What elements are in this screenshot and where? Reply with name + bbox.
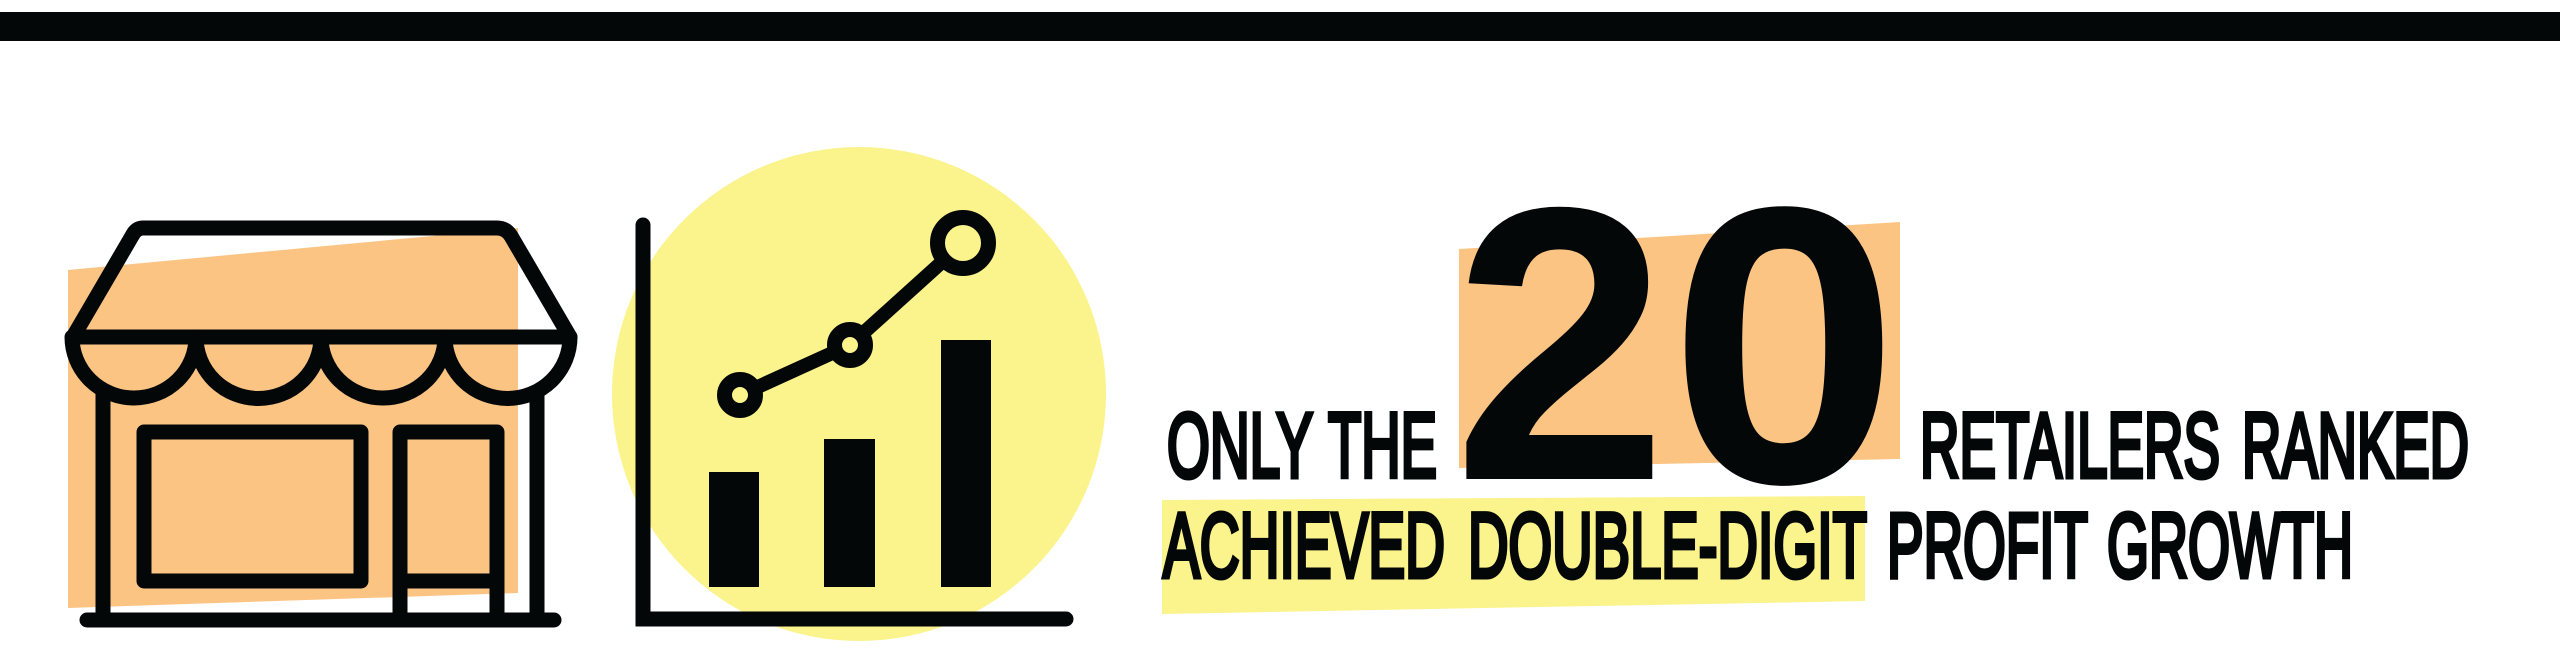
highlight: yellow text backdrop (1162, 496, 1865, 614)
highlight: 20 backdrop (1459, 222, 1900, 468)
columns (103, 390, 537, 620)
door (400, 432, 497, 620)
bars (709, 340, 991, 587)
headline line 2 (1163, 495, 2353, 597)
headline line 2: ACHIEVED (1163, 495, 1445, 597)
icon: storefront (68, 228, 570, 620)
ground line (87, 612, 554, 628)
orange backdrop (68, 228, 518, 608)
icon: growth chart (612, 147, 1106, 641)
headline line 2: GROWTH (2107, 495, 2353, 597)
big number 20: 2 (1453, 127, 1668, 562)
headline line 1: THE (1328, 395, 1437, 497)
headline line 2: PROFIT (1887, 495, 2088, 597)
window (144, 432, 361, 581)
top black bar (0, 12, 2560, 41)
trend line (740, 243, 963, 395)
awning roof (73, 228, 570, 337)
trend markers (724, 218, 988, 410)
axes (643, 225, 1066, 619)
big number 20 (1453, 125, 1899, 566)
big number 20: 0 (1669, 125, 1899, 566)
headline line 1: ONLY (1167, 395, 1313, 497)
headline line 1 (1167, 395, 2469, 497)
awning scallops (72, 337, 570, 398)
headline line 1: RETAILERS (1920, 395, 2220, 497)
headline line 2: DOUBLE-DIGIT (1468, 495, 1867, 597)
yellow circle backdrop (612, 147, 1106, 641)
